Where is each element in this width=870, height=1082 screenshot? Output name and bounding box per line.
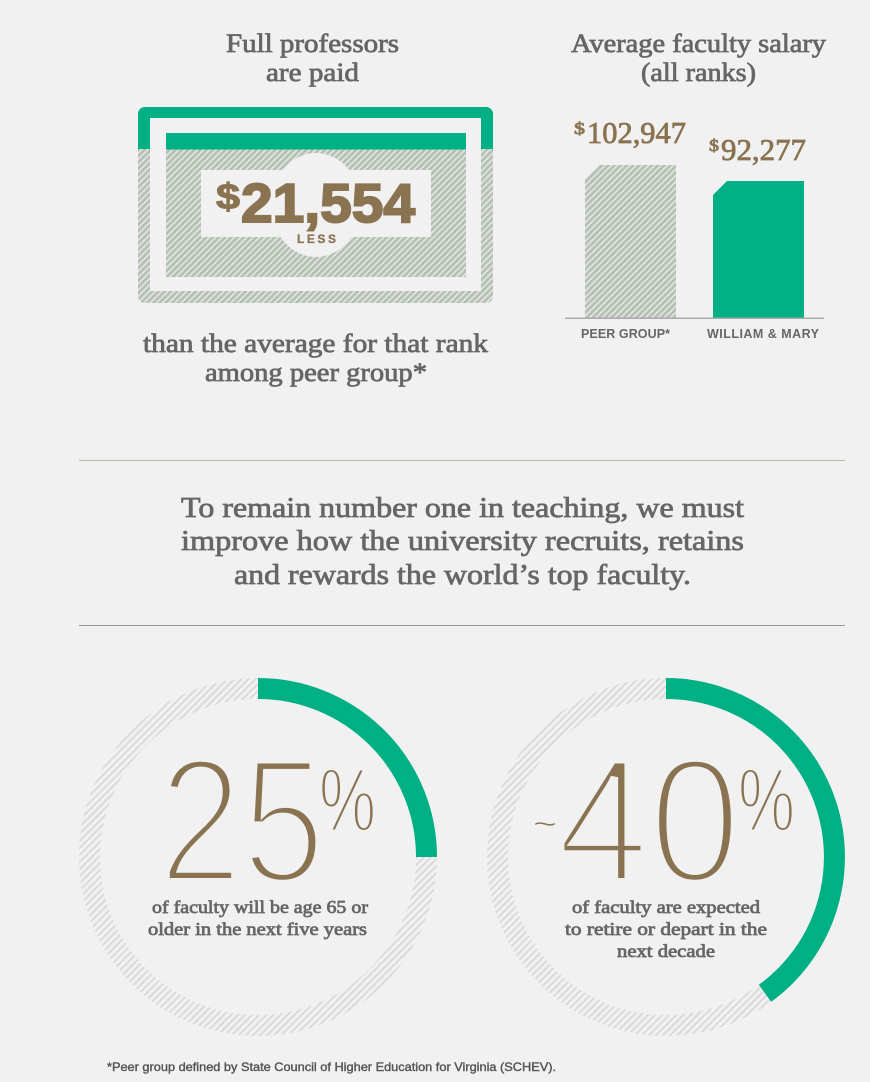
caption: to retire or depart in the xyxy=(565,919,767,939)
heading: average faculty salary xyxy=(571,29,826,87)
label: peer group: PEER GROUP* xyxy=(581,327,670,341)
panel: 40 percent ring xyxy=(498,688,834,1026)
value: william and mary: 92,277 xyxy=(721,132,806,167)
icon: dollar bill xyxy=(138,107,493,303)
value: william and mary: $ xyxy=(709,136,719,155)
big number: ~40%: % xyxy=(738,751,795,851)
heading: full professors are paid xyxy=(226,29,399,87)
statement text: To remain number one in teaching, we must xyxy=(181,492,744,524)
statement text: and rewards the world’s top faculty. xyxy=(234,559,691,591)
value: peer group: $ xyxy=(574,119,585,138)
panel: full professors pay gap xyxy=(138,29,493,387)
caption xyxy=(148,897,368,939)
caption: older in the next five years xyxy=(148,919,367,939)
caption: next decade xyxy=(617,941,715,961)
heading: full professors are paid: Full professors xyxy=(226,29,399,58)
panel: average faculty salary xyxy=(565,29,826,341)
bar: william and mary xyxy=(713,181,804,318)
value: peer group: 102,947 xyxy=(587,115,686,150)
amount: $21,554 less: 21,554 xyxy=(241,172,415,234)
text: than the average xyxy=(143,329,488,387)
ring track xyxy=(90,688,426,1026)
footnote: *Peer group defined by State Council of Higher Education for Virginia (SCHEV). xyxy=(107,1060,556,1074)
panel: 25 percent ring xyxy=(90,688,426,1026)
big number: 25%: % xyxy=(319,751,376,851)
caption: of faculty are expected xyxy=(572,897,760,917)
bar chart xyxy=(565,115,824,341)
statement text: improve how the university recruits, retains xyxy=(181,525,744,557)
caption xyxy=(565,897,767,961)
caption: of faculty will be age 65 or xyxy=(152,897,368,917)
amount: $21,554 less: LESS xyxy=(297,232,336,246)
ring value arc xyxy=(258,688,426,857)
heading: average faculty salary: Average faculty salary xyxy=(571,29,826,58)
label: william and mary: WILLIAM & MARY xyxy=(707,327,820,341)
big number: 25%: 25 xyxy=(159,721,325,920)
statement text xyxy=(181,492,744,591)
text: than the average: than the average for that rank xyxy=(143,329,488,358)
big number: ~40%: ~ xyxy=(533,806,557,842)
ring value arc xyxy=(666,688,834,993)
big number: ~40%: 40 xyxy=(557,721,741,920)
heading: average faculty salary: (all ranks) xyxy=(641,58,756,87)
text: than the average: among peer group* xyxy=(205,358,427,387)
bar: peer group xyxy=(585,165,676,318)
ring track xyxy=(498,688,834,1026)
heading: full professors are paid: are paid xyxy=(266,58,359,87)
amount: $21,554 less: $ xyxy=(216,176,240,217)
